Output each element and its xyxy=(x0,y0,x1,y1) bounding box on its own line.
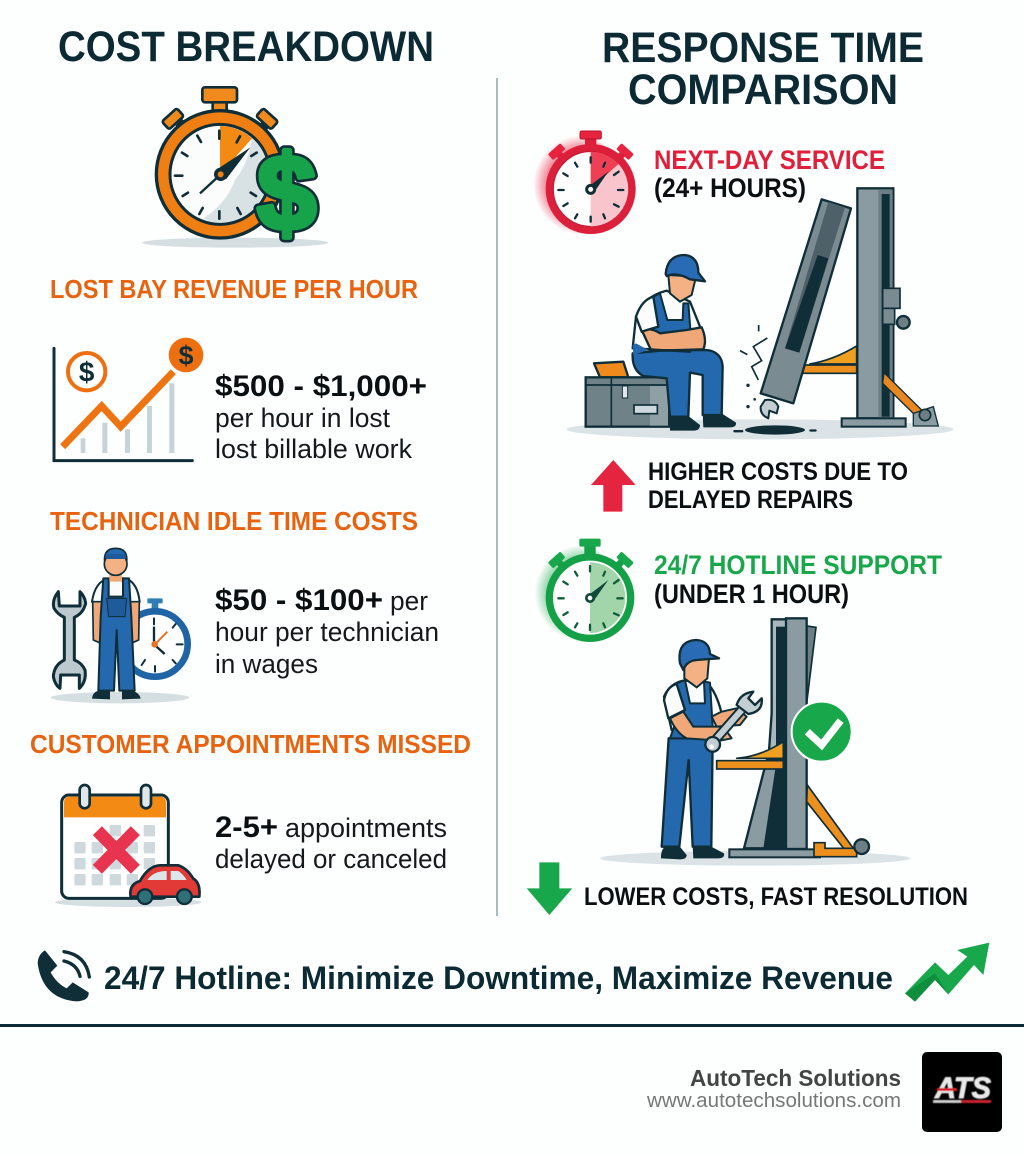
crack xyxy=(740,325,767,380)
text: technician wages figure: in wages xyxy=(215,649,318,679)
logo xyxy=(922,1052,1002,1132)
icon: revenue chart xyxy=(54,338,203,461)
text: technician wages figure: hour per technician xyxy=(215,617,439,647)
technician xyxy=(662,738,713,847)
text: appointments figure: delayed or canceled xyxy=(215,844,447,874)
heading: 24/7 hotline support: 24/7 HOTLINE SUPPORT xyxy=(654,550,942,580)
text: higher costs: HIGHER COSTS DUE TO xyxy=(648,458,908,486)
heading: next-day service: NEXT-DAY SERVICE xyxy=(654,145,885,175)
arrow: red up xyxy=(591,460,636,512)
icon: stopwatch with dollar sign: $ xyxy=(257,132,316,252)
heading: lost bay revenue: LOST BAY REVENUE PER HOUR xyxy=(50,274,418,304)
title: response time comparison xyxy=(602,24,924,114)
toolbox xyxy=(594,362,628,377)
heading: next-day service: (24+ HOURS) xyxy=(654,173,806,203)
text: technician wages figure xyxy=(215,584,439,679)
arrow: green down xyxy=(527,862,572,915)
title: response time comparison: RESPONSE TIME xyxy=(602,24,924,72)
heading: technician idle time: TECHNICIAN IDLE TIME COSTS xyxy=(50,506,418,536)
text: technician wages figure: $50 - $100+ xyxy=(215,584,383,617)
text: lost revenue figure: $500 - $1,000+ xyxy=(215,370,427,403)
text: appointments figure: 2-5+ xyxy=(215,811,278,844)
icon: red stopwatch xyxy=(523,131,634,235)
heading: customer appointments missed: CUSTOMER APPOINTMENTS MISSED xyxy=(30,729,471,759)
footer brand text: www.autotechsolutions.com xyxy=(646,1090,901,1112)
title: cost breakdown: COST BREAKDOWN xyxy=(58,23,434,71)
technician sitting xyxy=(670,416,700,431)
heading: 24/7 hotline support: (UNDER 1 HOUR) xyxy=(654,579,849,609)
heading: 24/7 hotline support xyxy=(654,550,942,609)
icon: green stopwatch xyxy=(525,539,634,642)
text: lost revenue figure: per hour in lost xyxy=(215,403,390,433)
illustration: technician repairing lift xyxy=(600,618,910,866)
check badge xyxy=(792,702,852,762)
wrench xyxy=(717,710,742,738)
icon: green growth arrow xyxy=(905,943,989,1002)
footer brand text xyxy=(646,1065,901,1112)
lift xyxy=(744,760,787,848)
text: higher costs: DELAYED REPAIRS xyxy=(648,486,853,514)
icon: revenue chart: $ xyxy=(79,357,95,388)
text: higher costs xyxy=(648,458,908,514)
icon: calendar with cross and car xyxy=(55,785,202,907)
text: appointments figure: appointments xyxy=(285,813,447,843)
head xyxy=(684,658,709,687)
oil puddle xyxy=(745,425,805,435)
lift arms xyxy=(883,373,922,416)
lift post xyxy=(857,188,893,418)
broken wrench xyxy=(761,400,778,418)
tilted post xyxy=(761,199,851,403)
heading: next-day service xyxy=(654,145,885,203)
text: lost revenue figure: lost billable work xyxy=(215,434,412,464)
icon: technician with wrench and clock xyxy=(51,548,189,703)
logo: ATS xyxy=(934,1072,991,1105)
icon: stopwatch with dollar sign xyxy=(142,87,328,252)
banner text: 24/7 Hotline: Minimize Downtime, Maximize Revenue xyxy=(104,960,893,996)
text: technician wages figure: per xyxy=(390,586,428,616)
illustration: waiting technician and broken lift xyxy=(567,188,953,439)
text: lost revenue figure xyxy=(215,370,427,464)
title: response time comparison: COMPARISON xyxy=(628,66,898,114)
text: appointments figure xyxy=(215,811,447,874)
text: lower costs: LOWER COSTS, FAST RESOLUTION xyxy=(584,883,968,911)
icon: stopwatch with dollar sign: $ xyxy=(257,132,316,252)
icon: phone xyxy=(38,950,89,1001)
icon: revenue chart: $ xyxy=(179,341,194,371)
footer brand text: AutoTech Solutions xyxy=(690,1065,901,1091)
